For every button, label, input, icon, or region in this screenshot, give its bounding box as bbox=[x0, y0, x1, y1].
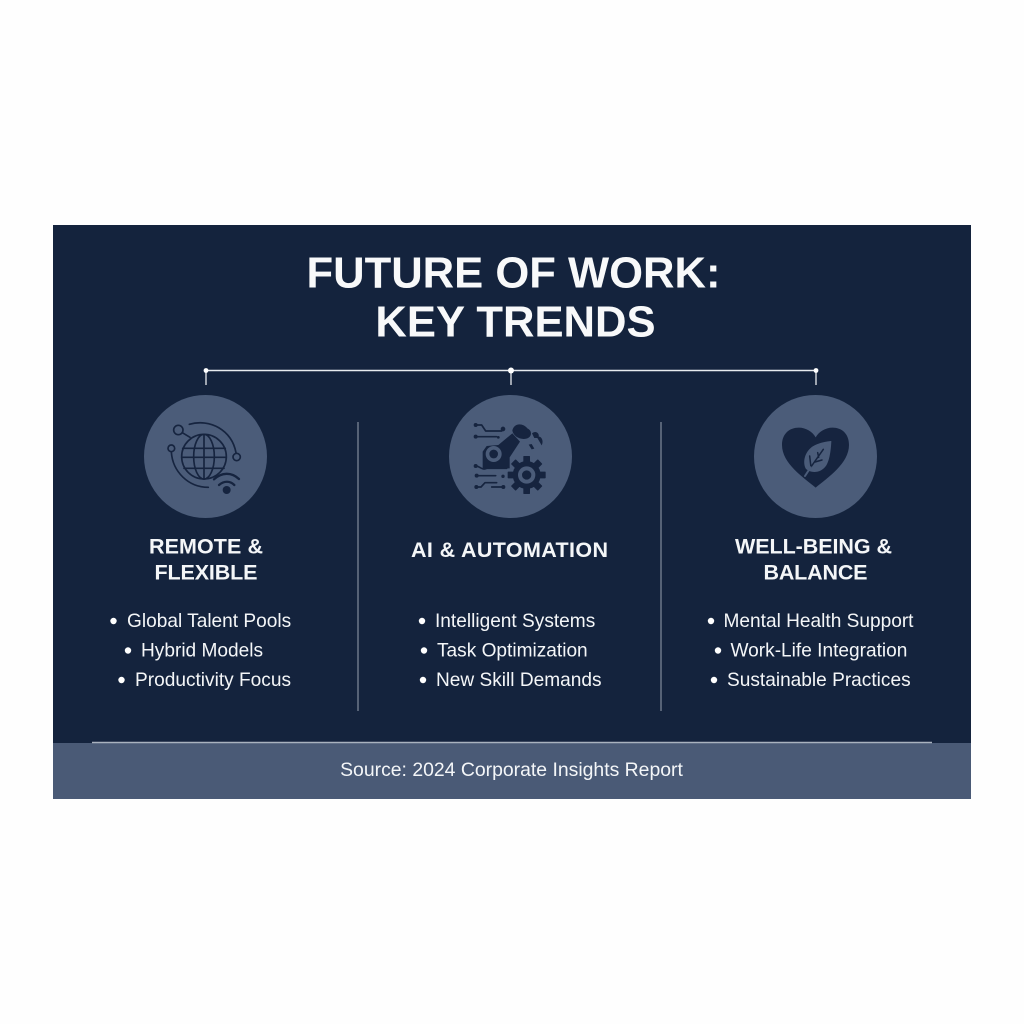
title: KEY TRENDS bbox=[375, 298, 656, 346]
list: well-being and balance: Mental Health Support bbox=[724, 611, 914, 632]
list: AI and automation: Task Optimization bbox=[437, 640, 588, 662]
list: remote and flexible: Productivity Focus bbox=[135, 670, 291, 691]
column dividers bbox=[358, 422, 661, 711]
list: AI and automation: New Skill Demands bbox=[436, 670, 602, 691]
title: FUTURE OF WORK: bbox=[306, 250, 721, 298]
list: well-being and balance: Work-Life Integration bbox=[730, 640, 907, 662]
heading: remote and flexible bbox=[149, 534, 263, 584]
icon: heart with leaf bbox=[754, 395, 877, 518]
connector bracket bbox=[204, 368, 818, 385]
heading: remote and flexible: REMOTE & bbox=[149, 534, 263, 558]
list: remote and flexible: Hybrid Models bbox=[141, 640, 263, 662]
heading: well-being and balance: BALANCE bbox=[764, 560, 868, 584]
list: AI and automation: Intelligent Systems bbox=[435, 611, 595, 632]
list: AI and automation bbox=[419, 611, 602, 691]
footer band bbox=[53, 743, 971, 799]
list: well-being and balance: Sustainable Practices bbox=[727, 670, 911, 691]
source note: Source: 2024 Corporate Insights Report bbox=[340, 759, 683, 781]
list: well-being and balance bbox=[708, 611, 914, 691]
icon: robot arm with gear and circuits bbox=[449, 395, 572, 518]
heading: AI and automation: AI & AUTOMATION bbox=[411, 538, 608, 562]
heading: well-being and balance bbox=[735, 534, 892, 584]
column: remote and flexible bbox=[110, 395, 291, 691]
icon: globe with network and wifi bbox=[144, 395, 267, 518]
list: remote and flexible: Global Talent Pools bbox=[127, 611, 291, 632]
heading: well-being and balance: WELL-BEING & bbox=[735, 534, 892, 558]
column: well-being and balance bbox=[708, 395, 914, 691]
footer rule bbox=[92, 742, 932, 744]
column: AI and automation bbox=[411, 395, 608, 691]
title bbox=[306, 250, 721, 346]
list: remote and flexible bbox=[110, 611, 291, 691]
panel: main card bbox=[53, 225, 971, 743]
heading: remote and flexible: FLEXIBLE bbox=[154, 560, 258, 584]
